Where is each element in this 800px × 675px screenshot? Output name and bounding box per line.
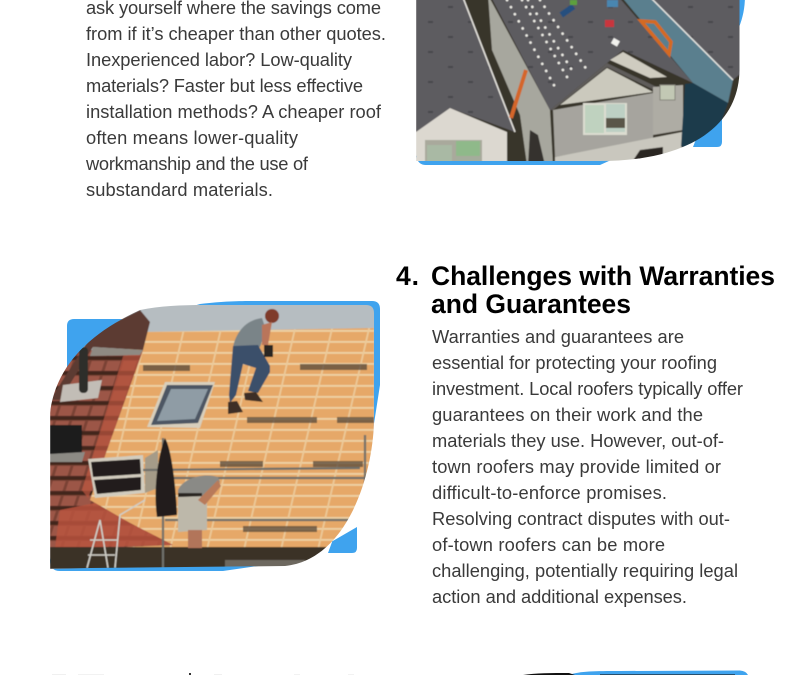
text block: warranties paragraph: materials they use. However, out-of- bbox=[432, 430, 724, 451]
blue backing shape bbox=[416, 0, 745, 165]
text block: savings paragraph: often means lower-quality bbox=[86, 127, 299, 148]
text block: warranties paragraph: Resolving contract disputes with out- bbox=[432, 508, 730, 529]
blue backing shape bbox=[50, 301, 380, 571]
text block: warranties paragraph bbox=[432, 326, 743, 607]
roofer on ladder bbox=[178, 475, 220, 496]
photo: aerial view of roofers on a house bbox=[416, 0, 746, 165]
photo: top edge of next section image bbox=[523, 670, 748, 675]
text block: savings paragraph: substandard materials. bbox=[86, 179, 273, 200]
text block: warranties paragraph: guarantees on their work and the bbox=[432, 404, 703, 425]
text block: warranties paragraph: difficult-to-enforce promises. bbox=[432, 482, 667, 503]
text block: savings paragraph: from if it’s cheaper than other quotes. bbox=[86, 23, 386, 44]
text block: warranties paragraph: action and additional expenses. bbox=[432, 586, 687, 607]
text block: warranties paragraph: investment. Local roofers typically offer bbox=[432, 378, 743, 399]
text block: savings paragraph: Inexperienced labor? Low-quality bbox=[86, 49, 353, 70]
text block: warranties paragraph: Warranties and guarantees are bbox=[432, 326, 684, 347]
text block: warranties paragraph: of-town roofers can be more bbox=[432, 534, 665, 555]
photo: roofers working on an underlaid roof bbox=[50, 300, 380, 572]
heading: cropped top of next section heading bbox=[52, 673, 354, 675]
heading: challenges with warranties and guarantees: 4. bbox=[396, 261, 419, 291]
text block: warranties paragraph: town roofers may provide limited or bbox=[432, 456, 721, 477]
heading: challenges with warranties and guarantees bbox=[396, 261, 775, 319]
text block: savings paragraph: materials? Faster but less effective bbox=[86, 75, 363, 96]
text block: warranties paragraph: challenging, potentially requiring legal bbox=[432, 560, 738, 581]
text block: savings paragraph bbox=[85, 0, 386, 200]
text block: warranties paragraph: essential for protecting your roofing bbox=[432, 352, 717, 373]
roofer on roof bbox=[233, 318, 266, 347]
text block: savings paragraph: installation methods? A cheaper roof bbox=[86, 101, 382, 122]
text block: savings paragraph: workmanship and the use of bbox=[85, 153, 309, 174]
heading: challenges with warranties and guarantees: Challenges with Warranties bbox=[431, 261, 775, 291]
heading: challenges with warranties and guarantees: and Guarantees bbox=[431, 289, 631, 319]
